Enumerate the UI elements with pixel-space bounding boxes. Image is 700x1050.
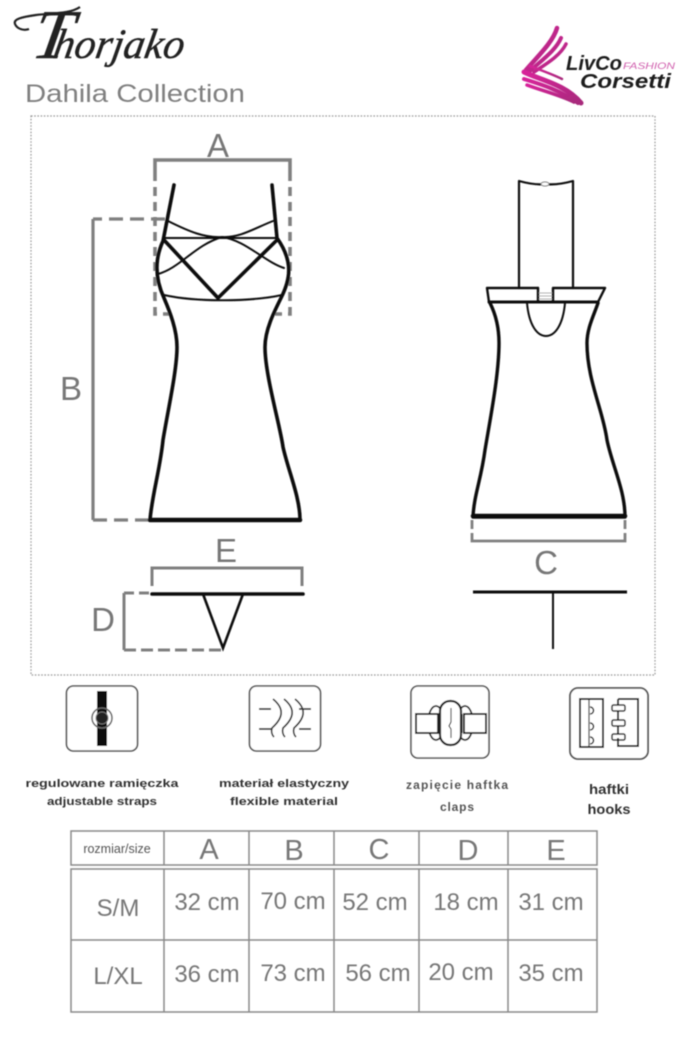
LivCo wordmark: LivCo — [566, 53, 622, 75]
table row L/XL — [93, 959, 584, 990]
dimension C bracket — [472, 520, 625, 541]
table row L/XL: 56 cm — [345, 960, 411, 987]
icon: flexible material — [250, 686, 320, 751]
front thong — [152, 594, 303, 648]
dimension E bracket — [152, 568, 302, 586]
caption: hooks: hooks — [588, 801, 631, 817]
label D: D — [91, 601, 115, 638]
table header: C — [369, 834, 389, 866]
table row S/M: 18 cm — [433, 889, 499, 916]
label E: E — [215, 532, 237, 569]
table header: B — [284, 835, 304, 867]
back neckline — [527, 303, 565, 336]
table row L/XL: 35 cm — [518, 960, 584, 987]
table row S/M: S/M — [97, 895, 139, 922]
dimension D bracket — [124, 593, 222, 650]
back strap panel — [519, 181, 573, 288]
back thong — [473, 592, 627, 649]
table row L/XL: 36 cm — [174, 961, 240, 988]
table row S/M: 32 cm — [174, 889, 240, 916]
table grid — [71, 831, 597, 1012]
panel: dotted diagram frame — [31, 116, 655, 675]
caption: clasp: claps — [440, 800, 474, 814]
back body — [473, 303, 625, 517]
back band — [487, 288, 605, 302]
caption: flexible material: flexible material — [230, 796, 338, 808]
back garment outline — [473, 181, 625, 517]
caption: adjustable straps: regulowane ramięczka — [26, 778, 180, 790]
caption: clasp: zapięcie haftka — [406, 778, 508, 792]
FASHION wordmark: FASHION — [623, 61, 676, 71]
table row L/XL: 20 cm — [428, 959, 494, 986]
caption: adjustable straps: adjustable straps — [47, 796, 157, 808]
table row S/M — [97, 888, 584, 922]
dimension A bracket — [155, 160, 290, 314]
label B: B — [60, 370, 82, 407]
table row S/M: 52 cm — [342, 889, 408, 916]
label A: A — [207, 127, 229, 164]
table header: A — [199, 834, 219, 866]
logo: LivCo Corsetti — [524, 28, 676, 103]
caption: hooks: haftki — [589, 781, 629, 797]
table row S/M: 31 cm — [518, 889, 584, 916]
icon: adjustable straps — [66, 686, 138, 751]
table row L/XL: L/XL — [93, 963, 143, 990]
caption: flexible material: materiał elastyczny — [219, 778, 350, 790]
table row L/XL: 73 cm — [260, 960, 326, 987]
icon: hooks — [570, 688, 648, 759]
table header: rozmiar/size — [83, 842, 151, 856]
table row S/M: 70 cm — [260, 888, 326, 915]
table header — [83, 834, 566, 867]
front garment outline — [150, 185, 300, 520]
size table — [71, 831, 597, 1012]
subtitle: Dahila Collection: Dahila Collection — [25, 80, 245, 108]
table header: D — [458, 835, 478, 867]
table header: E — [546, 835, 566, 867]
icon: clasp — [411, 686, 489, 758]
dimension B bracket — [93, 219, 165, 520]
label C: C — [534, 544, 558, 581]
icon: pink wing — [524, 28, 581, 103]
Corsetti wordmark: Corsetti — [580, 71, 672, 93]
